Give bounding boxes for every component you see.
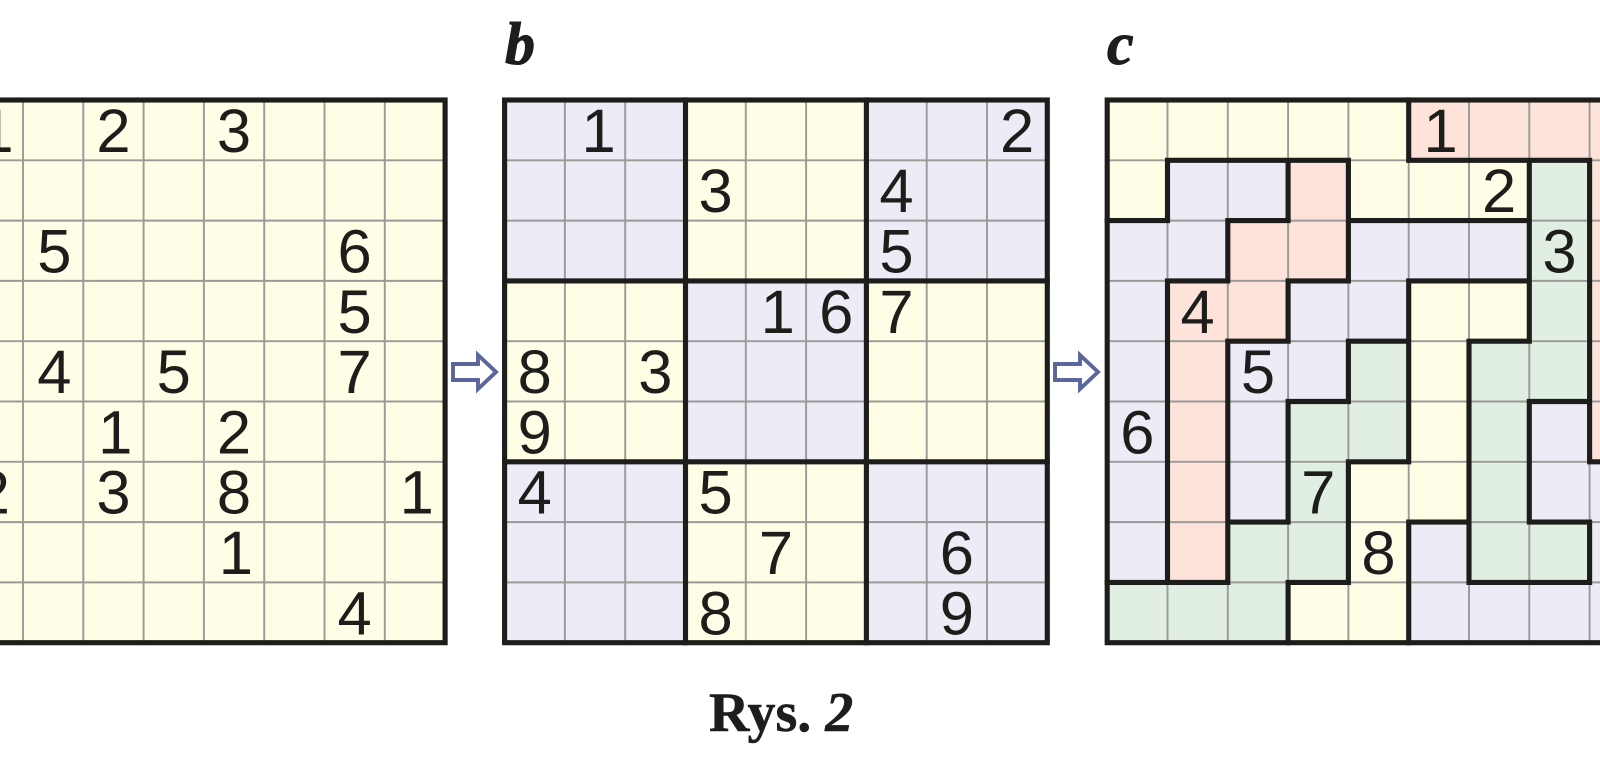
digits: grid b: 8 (699, 579, 733, 648)
arrow: a to b (453, 355, 496, 389)
digits: grid b: 7 (759, 519, 793, 588)
digits: grid c: 7 (1301, 459, 1335, 528)
panel: grid a (0, 97, 445, 648)
digits: grid a: 1 (98, 398, 132, 467)
digits: grid a: 8 (217, 459, 251, 528)
digits: grid b: 8 (518, 338, 552, 407)
digits: grid b: 7 (879, 278, 914, 347)
digits: grid a: 6 (338, 217, 372, 286)
caption: Rys. 2 (709, 682, 853, 744)
digits: grid a: 1 (219, 519, 253, 588)
digits: grid b: 1 (761, 278, 795, 347)
digits: grid c: 4 (1181, 278, 1215, 347)
digits: grid a: 2 (96, 97, 131, 166)
arrow: b to c (1055, 355, 1098, 389)
digits: grid b: 5 (879, 217, 914, 286)
digits: grid b: 6 (940, 519, 974, 588)
panel: grid b (505, 97, 1047, 648)
digits: grid c: 3 (1542, 217, 1577, 286)
digits: grid a: 3 (96, 459, 131, 528)
digits: grid c: 5 (1241, 338, 1275, 407)
digits: grid a: 2 (217, 398, 251, 467)
digits: grid a: 7 (338, 338, 372, 407)
digits: grid c (1120, 97, 1577, 588)
digits: grid c: 6 (1120, 398, 1154, 467)
digits: grid c: 1 (1424, 97, 1458, 166)
digits: grid a: 4 (338, 579, 372, 648)
heading: c: c (1107, 11, 1134, 77)
digits: grid b: 2 (1000, 97, 1034, 166)
digits: grid b: 6 (819, 278, 853, 347)
digits: grid b: 9 (518, 398, 552, 467)
heading: b: b (505, 11, 535, 77)
panel: grid c (1107, 97, 1600, 643)
digits: grid a: 4 (37, 338, 71, 407)
digits: grid a: 1 (400, 459, 434, 528)
digits: grid b: 4 (518, 459, 552, 528)
digits: grid c: 8 (1361, 519, 1396, 588)
digits: grid b (518, 97, 1034, 648)
digits: grid a (0, 97, 434, 648)
digits: grid a: 3 (217, 97, 251, 166)
digits: grid b: 3 (638, 338, 672, 407)
digits: grid b: 4 (879, 157, 914, 226)
digits: grid b: 9 (940, 579, 974, 648)
digits: grid b: 1 (582, 97, 616, 166)
digits: grid a: 5 (37, 217, 71, 286)
digits: grid a: 5 (157, 338, 191, 407)
digits: grid c: 2 (1482, 157, 1516, 226)
digits: grid b: 5 (699, 459, 733, 528)
digits: grid a: 5 (338, 278, 372, 347)
digits: grid b: 3 (699, 157, 733, 226)
